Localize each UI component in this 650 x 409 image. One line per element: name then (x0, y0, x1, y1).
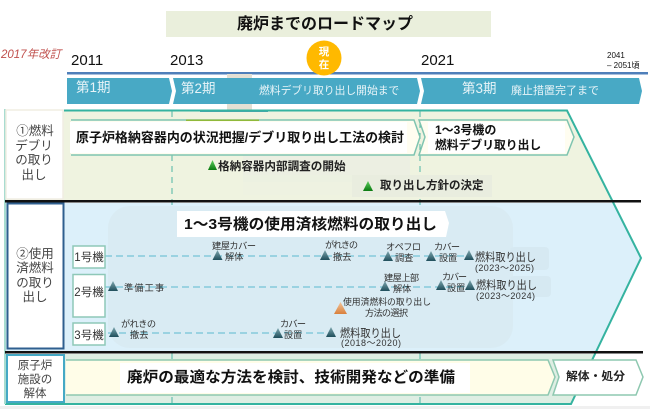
row 2 heading (177, 211, 449, 237)
rubble removal: 撤去 (333, 251, 351, 262)
phase arrows (67, 78, 642, 104)
panel: row 3 label: 施設の (18, 373, 52, 386)
timeline (67, 51, 648, 78)
phase 1: 第1期 (76, 79, 111, 95)
panel: row 1 label (6, 110, 63, 199)
outer roadmap arrow outline (5, 109, 641, 404)
row 3 task: preparation: 廃炉の最適な方法を検討、技術開発などの準備 (127, 368, 455, 386)
fuel removal 2018-2020: (2018～2020) (341, 338, 401, 348)
operating floor survey: オペフロ (386, 242, 421, 252)
panel: row 1 label: の取り (15, 153, 53, 167)
panel: row 3 label: 解体 (24, 386, 47, 400)
title: 廃炉までのロードマップ (237, 15, 413, 33)
spent fuel removal method selection: 使用済燃料の取り出し (343, 296, 431, 307)
preparatory works: 準備工事 (124, 282, 164, 293)
unit 3 label (73, 323, 105, 345)
preparatory works (108, 281, 164, 293)
panel: row 2 label (8, 204, 64, 348)
cover installation (273, 319, 306, 340)
fuel removal 2023-2024: (2023～2024) (476, 291, 535, 301)
cover installation (436, 272, 467, 293)
timeline: 2013 (170, 52, 203, 69)
row 2 heading: 1～3号機の使用済核燃料の取り出し (184, 215, 437, 233)
phase 2: 第2期 (181, 80, 216, 96)
building cover removal (212, 240, 256, 262)
row 1 task: investigation: 原子炉格納容器内の状況把握/デブリ取り出し工法の検討 (76, 130, 404, 145)
panel: row 2 label: 済燃料 (16, 260, 54, 275)
dividers (5, 200, 641, 202)
panel: row 2 spent fuel background (5, 203, 641, 351)
phase 3: 廃止措置完了まで (511, 83, 599, 97)
current marker: 在 (319, 58, 329, 71)
timeline: 2041 (607, 51, 625, 60)
row 1 task: debris removal: 燃料デブリ取り出し (435, 138, 541, 152)
current marker (306, 40, 342, 76)
fuel removal 2023-2024: 燃料取り出し (476, 278, 537, 292)
panel: row 2 label: ②使用 (16, 246, 54, 261)
spent fuel removal method selection (334, 296, 431, 318)
rubble removal (320, 239, 358, 262)
panel: row 3 label (7, 355, 64, 402)
title (166, 11, 491, 37)
cover installation: 設置 (439, 253, 457, 263)
timeline: 2021 (421, 52, 454, 69)
panel: row 3 label: 原子炉 (18, 359, 52, 372)
fuel removal 2018-2020: 燃料取り出し (340, 326, 401, 340)
row 3 task: preparation (66, 360, 555, 395)
upper building removal: 解体 (393, 283, 411, 294)
milestone: investigation start: 格納容器内部調査の開始 (218, 159, 346, 173)
cover installation: 設置 (284, 330, 302, 340)
panel: row 2 label: の取り (16, 276, 54, 290)
unit 1 milestones (212, 239, 536, 273)
panel: row 1 label: 出し (21, 168, 47, 182)
upper building removal: 建屋上部 (384, 272, 419, 283)
unit 2 milestones (108, 272, 537, 318)
cover installation: カバー (280, 319, 306, 329)
rubble removal: がれきの (325, 239, 358, 250)
spent fuel removal method selection: 方法の選択 (365, 307, 408, 318)
unit 2 label (73, 274, 105, 317)
phase 1 (67, 78, 172, 104)
fuel removal 2023-2025 (464, 250, 536, 273)
inner schedule panel (108, 206, 513, 348)
fuel removal 2023-2024 (465, 278, 537, 301)
building cover removal: 解体 (225, 251, 243, 262)
current marker: 現 (319, 46, 330, 58)
unit 3 milestones (109, 318, 401, 348)
cover installation: カバー (434, 242, 460, 252)
rubble removal (109, 318, 156, 340)
unit 1 label: 1号機 (74, 251, 104, 264)
phase 3 (421, 78, 642, 104)
revision note: 2017年改訂 (0, 48, 64, 61)
upper building removal (380, 272, 419, 294)
cover installation (426, 242, 460, 263)
row 3 task: dismantling: 解体・処分 (566, 369, 626, 383)
panel: row 2 label: 出し (22, 290, 48, 304)
row 3 task: dismantling (553, 360, 643, 395)
cover installation: 設置 (447, 283, 465, 293)
panel: row 1 label: ①燃料 (16, 123, 54, 138)
operating floor survey (383, 242, 421, 263)
fuel removal 2023-2025: (2023～2025) (475, 263, 534, 273)
row 1 task: debris removal (419, 120, 574, 155)
milestone: removal policy: 取り出し方針の決定 (380, 178, 484, 192)
row 1 task: investigation (70, 120, 420, 155)
fuel removal 2023-2025: 燃料取り出し (475, 250, 536, 264)
rubble removal: がれきの (121, 318, 156, 329)
cover installation: カバー (442, 272, 467, 282)
building cover removal: 建屋カバー (212, 240, 256, 251)
rubble removal: 撤去 (130, 329, 148, 340)
phase 2 (173, 78, 420, 104)
panel: row 1 fuel debris background (5, 110, 612, 200)
fuel removal 2018-2020 (326, 326, 401, 348)
phase 3: 第3期 (462, 80, 497, 96)
phase 2: 燃料デブリ取り出し開始まで (259, 83, 400, 97)
unit 3 label: 3号機 (74, 329, 104, 342)
panel: row 3 background (5, 354, 596, 404)
row 1 task: debris removal: 1～3号機の (435, 122, 496, 137)
unit 2 label: 2号機 (74, 286, 104, 299)
panel: row 1 label: デブリ (15, 138, 53, 153)
timeline: 2011 (71, 52, 103, 69)
timeline: – 2051頃 (607, 61, 639, 70)
unit 1 label (73, 246, 105, 268)
operating floor survey: 調査 (395, 252, 413, 263)
